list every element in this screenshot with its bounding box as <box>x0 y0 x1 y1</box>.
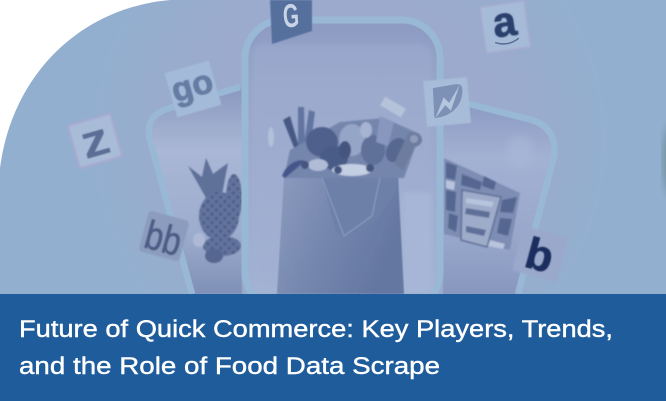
lighter inner panel <box>252 44 432 294</box>
lighter floor <box>402 192 432 294</box>
title banner <box>0 294 666 401</box>
pineapple and fruit <box>188 158 242 263</box>
logo tile: bolt <box>423 77 471 127</box>
logo tile: z <box>66 109 123 171</box>
background blob <box>0 0 666 294</box>
center phone <box>245 20 440 310</box>
title text: and the Role of Food Data Scrape <box>19 353 440 380</box>
logo tile: go: go <box>167 62 217 110</box>
right edge shadow <box>663 124 666 196</box>
left phone <box>149 87 242 294</box>
grocery bag <box>268 97 422 294</box>
title text <box>19 316 613 380</box>
grocery flyers <box>444 158 520 250</box>
logo tile: b: b <box>520 228 559 283</box>
vegetables <box>268 97 422 178</box>
logo tile: bb: bb <box>140 213 186 265</box>
right phone <box>443 100 554 294</box>
title text: Future of Quick Commerce: Key Players, Trends, <box>19 316 613 343</box>
logo tile: G <box>270 0 312 44</box>
logo tile: z: z <box>74 111 115 169</box>
logo tile: amazon <box>479 0 530 53</box>
logo tile: b <box>511 226 568 285</box>
